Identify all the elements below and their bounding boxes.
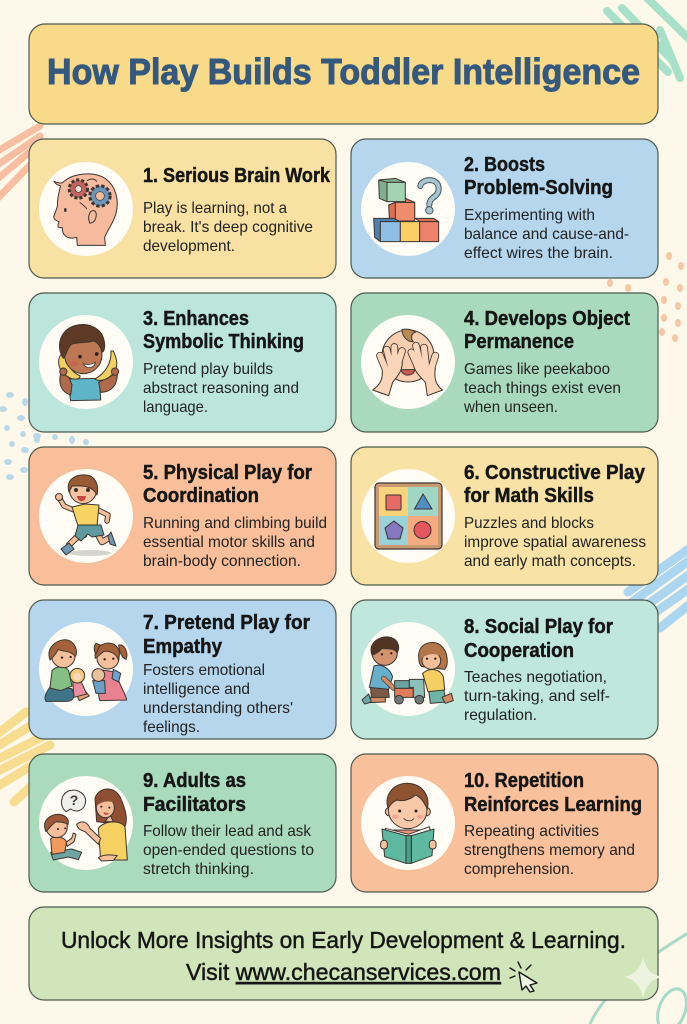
panel: card 4 object permanence	[351, 293, 658, 432]
text: call to action line 1: Unlock More Insights on Early Development & Learning.	[61, 927, 626, 953]
panel: card 2 problem solving	[351, 139, 658, 278]
icon: children with toy truck	[362, 637, 453, 704]
body text	[464, 669, 610, 724]
body text: Pretend play builds	[143, 361, 273, 378]
text: call to action line 2: Visit www.checanservices.com	[186, 959, 501, 985]
heading: 4. Develops Object	[464, 308, 630, 330]
decoration: yellow scribble left	[0, 712, 50, 802]
icon: head with gears	[54, 174, 117, 245]
body text	[464, 207, 629, 262]
heading	[143, 770, 246, 816]
body text: understanding others'	[143, 700, 293, 717]
icon: running boy	[56, 475, 116, 556]
heading: Empathy	[143, 636, 223, 658]
body text: Running and climbing build	[143, 515, 327, 532]
decoration: green curves bottom right	[590, 932, 687, 1024]
body text: break. It's deep cognitive	[143, 219, 313, 236]
body text	[464, 823, 635, 878]
body text	[143, 515, 327, 570]
icon: adult and child with question bubble: ?	[70, 792, 78, 808]
heading: 1. Serious Brain Work	[143, 165, 331, 187]
title banner	[29, 24, 658, 124]
decoration: green scribble top right	[607, 0, 687, 78]
body text: Follow their lead and ask	[143, 823, 312, 840]
body text: teach things exist even	[464, 380, 621, 397]
heading	[464, 154, 613, 199]
heading: 3. Enhances	[143, 308, 249, 330]
heading	[464, 770, 642, 816]
heading: Cooperation	[464, 640, 574, 662]
heading	[464, 462, 646, 507]
body text: when unseen.	[463, 399, 558, 416]
body text: Teaches negotiation,	[464, 669, 607, 686]
body text: comprehension.	[464, 861, 574, 878]
body text: language.	[143, 399, 208, 416]
heading: 5. Physical Play for	[143, 462, 312, 484]
body text: abstract reasoning and	[143, 380, 299, 397]
panel: card 8 social play	[351, 600, 658, 739]
heading	[464, 616, 613, 662]
title: How Play Builds Toddler Intelligence	[47, 51, 640, 92]
heading	[143, 308, 304, 353]
decoration: blue scribble right	[628, 548, 687, 628]
icon: children with doll and teddy	[45, 640, 127, 701]
heading: Problem-Solving	[464, 177, 613, 199]
heading: Facilitators	[143, 794, 246, 816]
heading: 8. Social Play for	[464, 616, 613, 638]
body text: development.	[143, 238, 235, 255]
icon: blocks and question mark	[374, 178, 439, 242]
body text: strengthens memory and	[464, 842, 635, 859]
panel: card 3 symbolic thinking	[29, 293, 336, 432]
icon: cursor click	[510, 962, 537, 992]
body text: essential motor skills and	[143, 534, 315, 551]
body text: feelings.	[143, 719, 200, 736]
decoration: salmon dots right	[607, 248, 684, 342]
heading: for Math Skills	[464, 485, 594, 507]
body text: Experimenting with	[464, 207, 595, 224]
heading	[464, 308, 630, 353]
panel: card 10 repetition	[351, 754, 658, 892]
heading: Symbolic Thinking	[143, 331, 304, 353]
body text	[143, 361, 299, 416]
heading: 9. Adults as	[143, 770, 246, 792]
body text: stretch thinking.	[143, 861, 254, 878]
body text: effect wires the brain.	[464, 245, 613, 262]
heading: Coordination	[143, 485, 259, 507]
icon: sparkle	[624, 958, 662, 998]
heading	[143, 612, 310, 658]
heading: 10. Repetition	[464, 770, 584, 792]
heading: 6. Constructive Play	[464, 462, 646, 484]
body text: Repeating activities	[464, 823, 599, 840]
panel: card 6 constructive play	[351, 447, 658, 585]
heading: 7. Pretend Play for	[143, 612, 310, 634]
icon: shape puzzle	[375, 483, 442, 549]
body text: open-ended questions to	[143, 842, 314, 859]
icon: boy reading book	[381, 783, 436, 863]
body text: brain-body connection.	[143, 553, 301, 570]
decoration: blue dots left	[0, 392, 89, 480]
decoration: salmon scribble left	[0, 126, 40, 198]
body text: regulation.	[464, 707, 537, 724]
body text: turn-taking, and self-	[464, 688, 610, 705]
panel: card 5 physical play	[29, 447, 336, 585]
body text	[143, 200, 313, 255]
heading: 2. Boosts	[464, 154, 545, 176]
body text	[464, 515, 646, 570]
body text: and early math concepts.	[464, 553, 636, 570]
panel: call to action	[29, 907, 662, 1000]
heading: Reinforces Learning	[464, 794, 642, 816]
heading	[143, 462, 312, 507]
body text	[143, 662, 293, 736]
body text: balance and cause-and-	[464, 226, 629, 243]
icon: boy with bananas	[59, 325, 119, 401]
icon: adult and child with question bubble	[45, 789, 127, 861]
panel: card 1 serious brain work	[29, 139, 336, 278]
body text: Puzzles and blocks	[464, 515, 594, 532]
body text: intelligence and	[143, 681, 250, 698]
body text: Play is learning, not a	[143, 200, 287, 217]
body text: Fosters emotional	[143, 662, 265, 679]
icon: peekaboo baby	[373, 329, 443, 396]
body text: Games like peekaboo	[464, 361, 610, 378]
body text	[143, 823, 314, 878]
heading: Permanence	[464, 331, 574, 353]
body text	[463, 361, 621, 416]
body text: improve spatial awareness	[464, 534, 646, 551]
panel: card 9 adults as facilitators	[29, 754, 336, 892]
panel: card 7 pretend play	[29, 600, 336, 739]
